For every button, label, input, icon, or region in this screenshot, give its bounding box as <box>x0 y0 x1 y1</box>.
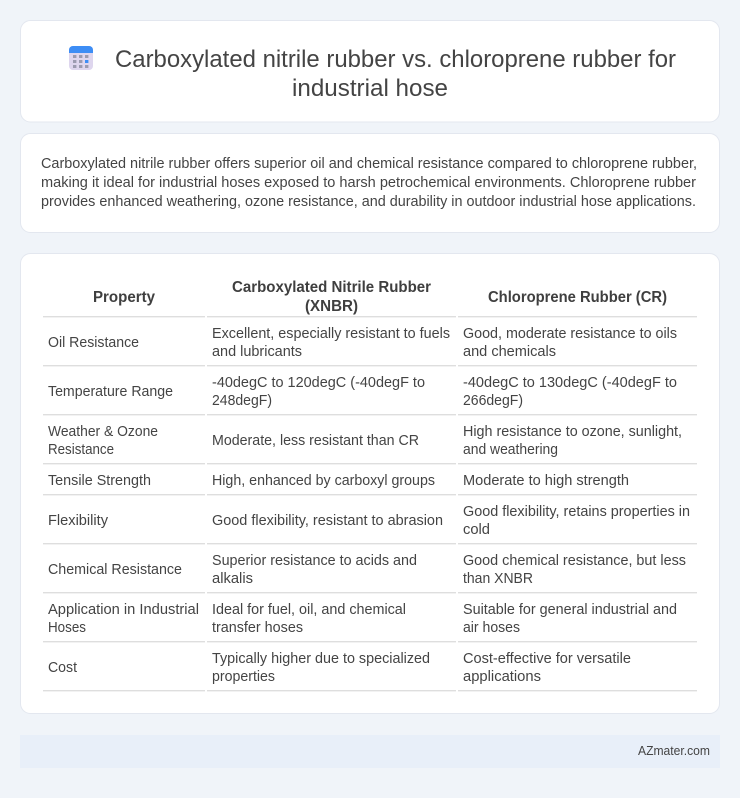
row: tensile strength: Moderate to high strength <box>463 473 629 489</box>
row: application in industrial hoses: Ideal for fuel, oil, and chemical <box>212 602 406 618</box>
intro panel <box>20 134 720 232</box>
footer source text: AZmater.com <box>638 744 710 758</box>
row: flexibility: Good flexibility, resistant to abrasion <box>212 513 443 529</box>
row: weather and ozone resistance <box>48 424 682 458</box>
row: temperature range: Temperature Range <box>48 384 173 400</box>
row: chemical resistance: Chemical Resistance <box>48 562 182 578</box>
row: flexibility: cold <box>463 522 490 538</box>
row: application in industrial hoses: transfer hoses <box>212 620 303 636</box>
row: chemical resistance: Good chemical resistance, but less <box>463 553 686 569</box>
row: weather and ozone resistance: Resistance <box>48 442 114 458</box>
row: application in industrial hoses <box>48 602 677 636</box>
row: cost: Typically higher due to specialized <box>212 651 430 667</box>
icon: calendar <box>69 46 93 70</box>
row: cost: Cost-effective for versatile <box>463 651 631 667</box>
row: chemical resistance: alkalis <box>212 571 253 587</box>
row: application in industrial hoses: Application in Industrial <box>48 602 199 618</box>
row: chemical resistance <box>48 553 686 587</box>
row: oil resistance: Oil Resistance <box>48 335 139 351</box>
row: tensile strength <box>48 473 629 489</box>
row: application in industrial hoses: Suitable for general industrial and <box>463 602 677 618</box>
intro text <box>41 156 697 210</box>
row: cost <box>48 651 631 685</box>
row: cost: Cost <box>48 660 77 676</box>
intro text: provides enhanced weathering, ozone resistance, and durability in outdoor industrial hose applications. <box>41 194 696 210</box>
table header: (XNBR) <box>305 298 358 315</box>
row: oil resistance: Good, moderate resistance to oils <box>463 326 677 342</box>
row: flexibility: Flexibility <box>48 513 109 529</box>
intro text: making it ideal for industrial hoses exposed to harsh petrochemical environments. Chloroprene rubber <box>41 175 696 191</box>
intro text: Carboxylated nitrile rubber offers superior oil and chemical resistance compared to chloroprene rubber, <box>41 156 697 172</box>
row: oil resistance: Excellent, especially resistant to fuels <box>212 326 450 342</box>
row: temperature range: -40degC to 130degC (-40degF to <box>463 375 677 391</box>
row: flexibility: Good flexibility, retains properties in <box>463 504 690 520</box>
row: tensile strength: Tensile Strength <box>48 473 151 489</box>
comparison table panel <box>20 254 720 714</box>
row: oil resistance <box>48 326 677 360</box>
row: application in industrial hoses: air hoses <box>463 620 520 636</box>
header card <box>20 20 720 122</box>
table header: Carboxylated Nitrile Rubber <box>232 279 431 296</box>
table header <box>93 279 667 315</box>
row: temperature range: 266degF) <box>463 393 523 409</box>
row: chemical resistance: than XNBR <box>463 571 533 587</box>
row: flexibility <box>48 504 690 538</box>
row: oil resistance: and chemicals <box>463 344 556 360</box>
row: temperature range <box>48 375 677 409</box>
row: oil resistance: and lubricants <box>212 344 302 360</box>
row: tensile strength: High, enhanced by carboxyl groups <box>212 473 435 489</box>
row: temperature range: -40degC to 120degC (-40degF to <box>212 375 425 391</box>
row: application in industrial hoses: Hoses <box>48 620 86 636</box>
row: cost: properties <box>212 669 275 685</box>
row: weather and ozone resistance: and weathering <box>463 442 558 458</box>
row: chemical resistance: Superior resistance to acids and <box>212 553 417 569</box>
footer bar <box>20 735 720 768</box>
row: cost: applications <box>463 669 541 685</box>
title: industrial hose <box>292 75 448 102</box>
row: weather and ozone resistance: Weather & Ozone <box>48 424 158 440</box>
table header: Property <box>93 289 155 306</box>
table header: Chloroprene Rubber (CR) <box>488 289 667 306</box>
title: Carboxylated nitrile rubber vs. chloroprene rubber for <box>115 46 676 73</box>
row: temperature range: 248degF) <box>212 393 272 409</box>
title <box>115 46 676 102</box>
row: weather and ozone resistance: Moderate, less resistant than CR <box>212 433 419 449</box>
row: weather and ozone resistance: High resistance to ozone, sunlight, <box>463 424 682 440</box>
